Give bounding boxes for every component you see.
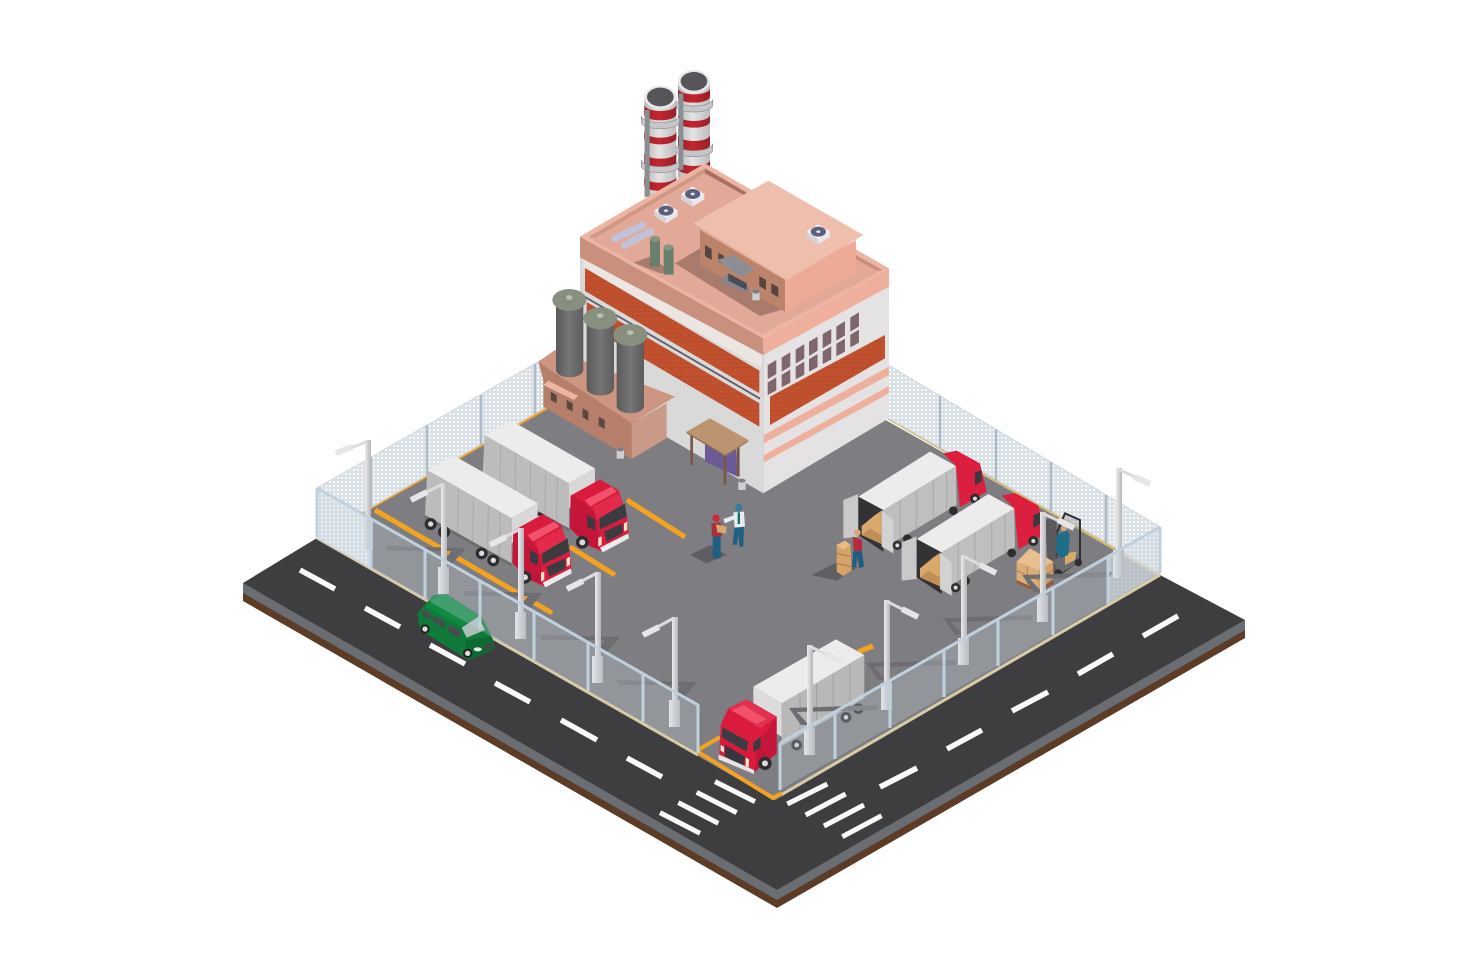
awning door: [717, 255, 755, 277]
entrance canopy: [687, 418, 748, 485]
roof shadow: [675, 248, 787, 316]
road markings: [300, 570, 1178, 787]
roof bin: [752, 290, 760, 300]
light pole shadows: [386, 546, 1112, 725]
upper white stripe: [583, 257, 762, 368]
rooftop fans: [654, 187, 830, 244]
truck open rear 2: [902, 493, 1045, 596]
chimney front: [641, 86, 679, 197]
truck front: [425, 456, 572, 587]
roof: [580, 163, 889, 338]
front fence left: [317, 488, 698, 753]
worker with hand truck: [812, 529, 864, 581]
ground road base: [243, 538, 1245, 908]
bins: [617, 447, 746, 490]
back fences: [317, 358, 1160, 603]
front fence right: [780, 527, 1160, 790]
left wall: [580, 253, 763, 493]
worker right: [723, 504, 745, 547]
brick bands: [585, 268, 759, 393]
rooftop pipes: [615, 226, 651, 245]
tanks: [552, 289, 647, 413]
rooftop vents: [633, 236, 674, 275]
annex with tanks: [538, 350, 675, 459]
chimneys: [641, 70, 713, 197]
penthouse: [693, 181, 863, 313]
light poles left: [336, 440, 680, 727]
workers center: [690, 504, 745, 563]
forklift with pallet: [1017, 513, 1082, 593]
worker left: [711, 515, 727, 558]
crosswalks: [660, 782, 882, 837]
unloading trucks right: [812, 451, 1082, 596]
right wall: [763, 287, 889, 493]
yard markings: [317, 408, 1160, 798]
windows: [767, 312, 859, 396]
wall stripes: [764, 367, 889, 443]
green car: [417, 594, 493, 660]
light poles right: [804, 468, 1150, 755]
factory building: [538, 163, 889, 493]
delivery truck bottom: [719, 639, 864, 774]
parapet sides: [580, 237, 763, 355]
yard ground: [317, 318, 1160, 800]
truck rear: [482, 421, 629, 552]
parked trucks left: [425, 421, 629, 587]
chimney rear: [675, 70, 713, 178]
truck open rear 1: [843, 451, 987, 553]
